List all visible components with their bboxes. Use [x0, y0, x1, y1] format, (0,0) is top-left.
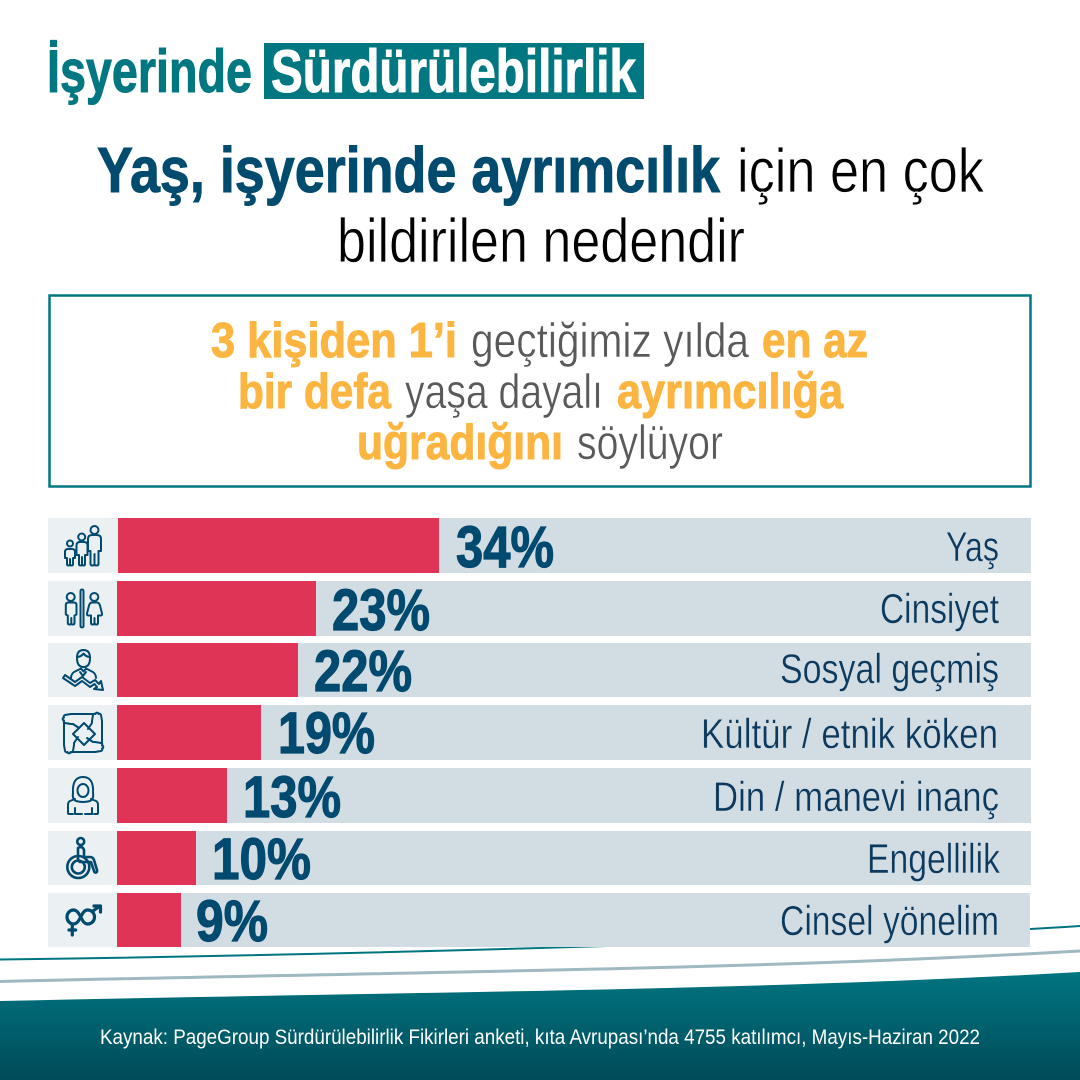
title: Yaş, işyerinde ayrımcılık [97, 134, 720, 206]
callout box: söylüyor [577, 417, 723, 470]
row: Yaş 34% [48, 515, 1031, 580]
row: Engellilik 10%: 10% [212, 827, 311, 892]
title: bildirilen nedendir [337, 207, 745, 276]
row: Kültür / etnik köken 19% [48, 701, 1031, 766]
row: Cinsiyet 23%: Cinsiyet [880, 585, 999, 632]
teal swoosh line [0, 926, 1080, 960]
row: Cinsel yönelim 9%: 9% [196, 889, 268, 954]
callout box: uğradığını [357, 416, 563, 470]
callout box [50, 296, 1030, 486]
row: Sosyal geçmiş 22%: 22% [314, 639, 412, 704]
grey swoosh line [0, 951, 1080, 982]
icon: wheelchair user [67, 838, 97, 878]
icon: woman with headscarf [68, 777, 98, 814]
callout box: en az [762, 314, 868, 368]
row: Cinsiyet 23% [48, 578, 1031, 643]
row: Din / manevi inanç 13%: 13% [243, 765, 341, 830]
callout box: geçtiğimiz yılda [471, 315, 749, 368]
row: Cinsel yönelim 9%: Cinsel yönelim [780, 897, 999, 944]
callout box: yaşa dayalı [405, 366, 603, 419]
row: Sosyal geçmiş 22%: Sosyal geçmiş [780, 645, 999, 692]
row: Cinsiyet 23%: 23% [332, 578, 430, 643]
callout box: ayrımcılığa [617, 365, 844, 419]
icon: family [65, 526, 101, 566]
row: Engellilik 10%: Engellilik [867, 835, 1001, 882]
icon: person with falling arrow [63, 650, 103, 690]
brand heading [47, 38, 644, 105]
brand heading: İşyerinde [47, 38, 252, 105]
icon: restroom man and woman [66, 590, 102, 628]
row: Cinsel yönelim 9% [48, 889, 1030, 954]
brand heading: Sürdürülebilirlik [271, 38, 637, 105]
row: Yaş 34%: 34% [456, 515, 554, 580]
title [97, 134, 985, 276]
row: Din / manevi inanç 13%: Din / manevi inanç [713, 773, 999, 820]
icon: gender symbols [67, 906, 100, 935]
row: Sosyal geçmiş 22% [48, 639, 1031, 704]
footer band [0, 972, 1080, 1080]
row: Kültür / etnik köken 19%: 19% [278, 701, 375, 766]
title: için en çok [737, 137, 985, 206]
row: Yaş 34%: Yaş [946, 523, 999, 570]
icon: interlocked hands [63, 713, 103, 753]
callout box: bir defa [238, 365, 392, 419]
callout box: 3 kişiden 1’i [211, 314, 457, 368]
row: Kültür / etnik köken 19%: Kültür / etnik köken [701, 710, 998, 757]
row: Engellilik 10% [48, 827, 1031, 892]
bar chart [48, 515, 1031, 954]
row: Din / manevi inanç 13% [48, 765, 1031, 830]
source note: Kaynak: PageGroup Sürdürülebilirlik Fikirleri anketi, kıta Avrupası’nda 4755 katılımcı, Mayıs-Haziran 2022 [100, 1026, 980, 1049]
